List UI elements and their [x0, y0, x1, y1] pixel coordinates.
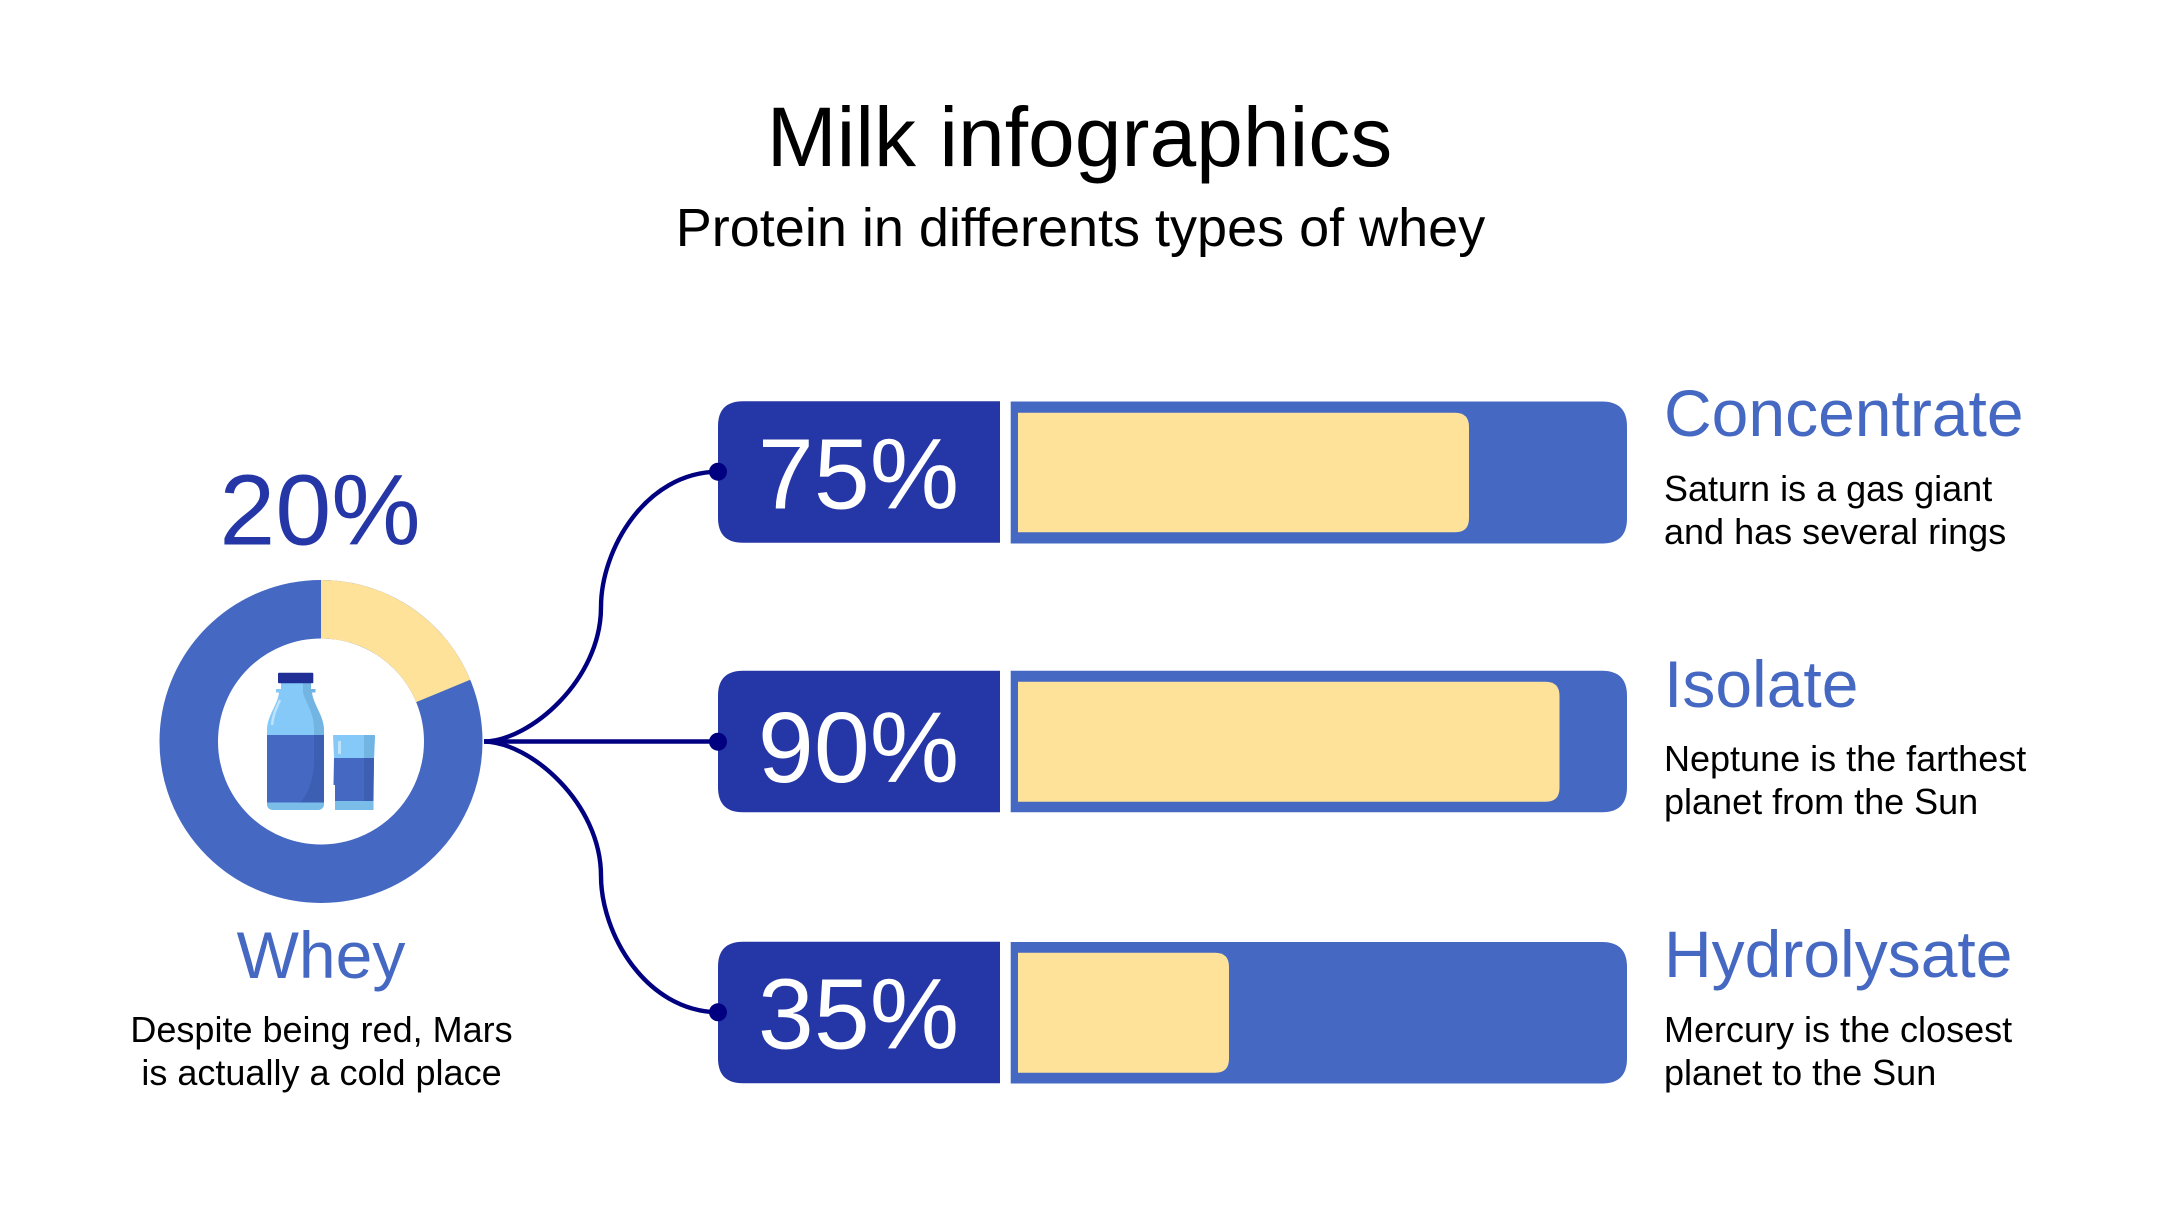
panel: isolate row — [709, 647, 2026, 822]
subtitle: Protein in differents types of whey — [676, 198, 1485, 258]
percentage tag 90% — [718, 671, 1000, 812]
progress bar 35% — [1011, 942, 1627, 1084]
description concentrate: and has several rings — [1664, 511, 2006, 552]
connector dot — [709, 733, 727, 751]
value 35%: 35% — [758, 958, 959, 1070]
icon: milk bottle and glass — [267, 673, 375, 810]
description hydrolysate: Mercury is the closest — [1664, 1009, 2012, 1050]
heading isolate: Isolate — [1664, 647, 1858, 721]
heading concentrate: Concentrate — [1664, 376, 2024, 450]
connector lines — [484, 472, 718, 1012]
connector dot — [709, 1003, 727, 1021]
connector dot — [709, 463, 727, 481]
title: Milk infographics — [767, 90, 1392, 184]
panel: hydrolysate row — [709, 917, 2012, 1093]
bar fill 90% — [1018, 682, 1560, 802]
bar fill 35% — [1018, 953, 1229, 1073]
donut chart — [189, 580, 470, 874]
whey label: Whey — [237, 918, 405, 992]
description hydrolysate: planet to the Sun — [1664, 1052, 1936, 1093]
panel: whey summary — [130, 454, 513, 1093]
description isolate: Neptune is the farthest — [1664, 738, 2026, 779]
whey description: is actually a cold place — [141, 1052, 502, 1093]
heading hydrolysate: Hydrolysate — [1664, 917, 2012, 991]
value 75%: 75% — [758, 419, 959, 531]
description concentrate: Saturn is a gas giant — [1664, 468, 1992, 509]
bar fill 75% — [1018, 413, 1469, 532]
whey percentage: 20% — [219, 454, 421, 566]
percentage tag 35% — [718, 942, 1000, 1083]
description isolate: planet from the Sun — [1664, 781, 1978, 822]
progress bar 75% — [1011, 402, 1627, 544]
panel: concentrate row — [709, 376, 2024, 552]
percentage tag 75% — [718, 401, 1000, 543]
whey description: Despite being red, Mars — [130, 1009, 513, 1050]
progress bar 90% — [1011, 671, 1627, 812]
value 90%: 90% — [758, 692, 959, 804]
